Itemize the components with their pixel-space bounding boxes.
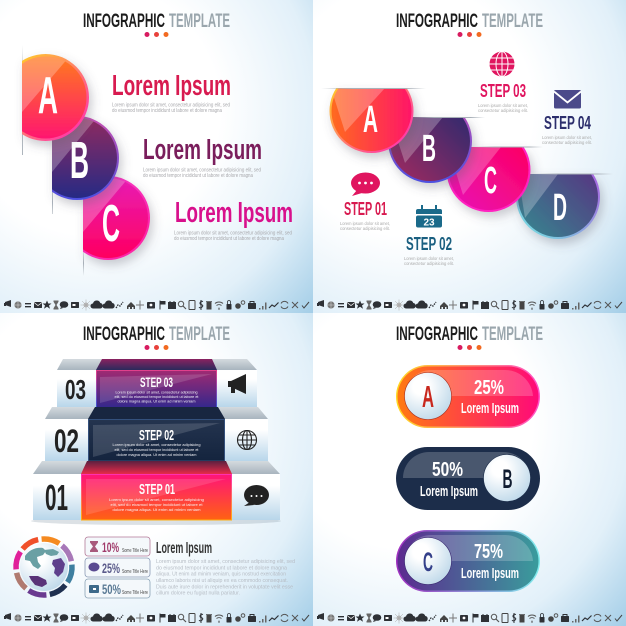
stat box 50% (85, 579, 150, 598)
stair 01: STEP 01 (139, 482, 175, 498)
stair 01 (33, 461, 280, 520)
paragraph: aliqua. Ut enim ad minim veniam, quis nostrud exercitation (156, 572, 286, 578)
icon: calendar (416, 205, 442, 228)
stair 03 (57, 359, 257, 408)
globe ring (16, 539, 72, 595)
stair 01: 01 (45, 477, 68, 518)
paragraph: Duis aute irure dolor in reprehenderit in voluptate velit esse (156, 584, 293, 590)
text A: do eiusmod tempor incididunt ut labore et dolore magna (112, 108, 222, 114)
title: INFOGRAPHIC (396, 324, 478, 345)
panel: four steps (313, 0, 626, 313)
stair shadow (31, 517, 281, 525)
stair 01: elit, sed do eiusmod tempor incididunt ut labore et (110, 502, 203, 507)
circle B (35, 110, 119, 200)
text B (143, 168, 261, 179)
icon row (4, 612, 309, 624)
step 03: Lorem ipsum dolor sit amet, (478, 103, 528, 109)
stat box 10%: 10% (102, 539, 119, 555)
heading B: Lorem Ipsum (143, 134, 262, 166)
text A (112, 102, 230, 114)
pill A: A (422, 379, 434, 414)
icon: calendar: 23 (423, 218, 435, 228)
stair 03: elit, sed do eiusmod tempor incididunt ut labore et (114, 394, 199, 399)
paragraph: Lorem ipsum dolor sit amet, consectetur adipisicing elit, sed (156, 559, 295, 565)
circle A (2, 50, 89, 141)
circle A (330, 69, 414, 153)
step 04: STEP 04 (544, 113, 591, 133)
paragraph: do eiusmod tempor incididunt ut labore et dolore magna (156, 566, 287, 572)
stair 01: Lorem ipsum dolor sit amet, consectetur adipisicing (109, 497, 204, 502)
step 02: Lorem ipsum dolor sit amet, (404, 256, 454, 262)
stair 03: Lorem ipsum dolor sit amet, consectetur adipisicing (116, 390, 198, 394)
stat box 50%: Some Title Here (122, 590, 148, 596)
circle C (446, 128, 530, 212)
step 03: consectetur adipisicing elit. (478, 108, 528, 114)
pill B: 50% (432, 459, 463, 481)
panel: ABC circles (0, 0, 313, 313)
title: INFOGRAPHIC (396, 11, 478, 32)
text C: Lorem ipsum dolor sit amet, consectetur adipisicing elit, sed (174, 230, 292, 236)
stair 03: STEP 03 (140, 375, 173, 390)
stat box 50%: 50% (102, 581, 121, 597)
title dots (458, 32, 482, 37)
stair 02 (45, 407, 268, 461)
icon row (317, 300, 622, 310)
title dots (144, 32, 168, 37)
heading A: Lorem Ipsum (112, 70, 231, 102)
panel: four steps: C (484, 160, 497, 202)
panel: ABC circles: C (102, 195, 120, 253)
pill A (396, 365, 540, 428)
stair 02: Lorem ipsum dolor sit amet, consectetur adipisicing (112, 442, 200, 447)
letter B: B (422, 128, 436, 170)
step 04 (542, 113, 592, 146)
heading: Lorem Ipsum: Lorem Ipsum (156, 540, 212, 557)
step 02: STEP 02 (406, 234, 452, 254)
pill C (396, 530, 540, 592)
pill C: Lorem Ipsum (461, 565, 519, 582)
text C (174, 230, 292, 242)
letter A: A (38, 67, 58, 125)
text A: Lorem ipsum dolor sit amet, consectetur adipisicing elit, sed (112, 102, 230, 108)
title: INFOGRAPHIC (83, 324, 165, 345)
title: INFOGRAPHIC (83, 11, 165, 32)
pill B: Lorem Ipsum (420, 483, 478, 500)
step 03: STEP 03 (480, 81, 526, 101)
step 03 (478, 81, 528, 114)
step 04: consectetur adipisicing elit. (542, 140, 592, 146)
pill A: 25% (474, 377, 504, 399)
stair 02: 02 (54, 423, 79, 459)
step 01: Lorem ipsum dolor sit amet, (340, 221, 390, 227)
panel: percentage pills (313, 313, 626, 626)
pill C: C (423, 547, 433, 577)
heading C: Lorem Ipsum (175, 197, 293, 229)
title: TEMPLATE (169, 324, 230, 345)
text B: do eiusmod tempor incididunt ut labore et dolore magna (143, 173, 253, 179)
text C: do eiusmod tempor incididunt ut labore et dolore magna (174, 236, 284, 242)
pill C: 75% (474, 541, 503, 563)
paragraph: cillum dolore eu fugiat nulla pariatur. (156, 590, 240, 596)
title dots (144, 345, 168, 350)
pill B (396, 447, 540, 510)
circle D (516, 155, 600, 239)
pill A: Lorem Ipsum (461, 400, 519, 417)
circle C (66, 170, 150, 260)
icon row (4, 300, 309, 310)
stat box 25% (85, 558, 150, 577)
step 01: consectetur adipisicing elit. (340, 226, 390, 232)
stat box 25%: Some Title Here (122, 569, 148, 575)
step 02: consectetur adipisicing elit. (404, 261, 454, 267)
stat box 10% (85, 537, 150, 556)
pill B: B (502, 464, 512, 494)
paragraph: ullamco laboris nisi ut aliquip ex ea commodo consequat. (156, 578, 288, 584)
letter A: A (363, 99, 378, 141)
step 01: STEP 01 (344, 199, 387, 219)
paragraph (156, 559, 295, 596)
title dots (458, 345, 482, 350)
stat box 25%: 25% (102, 560, 120, 576)
stair 03: 03 (65, 374, 86, 405)
stair 02: STEP 02 (139, 428, 174, 444)
step 04: Lorem ipsum dolor sit amet, (542, 135, 592, 141)
stair 03: dolore magna aliqua. Ut enim ad minim veniam (118, 398, 196, 404)
stair 02: elit, sed do eiusmod tempor incididunt ut labore et (114, 447, 199, 452)
text B: Lorem ipsum dolor sit amet, consectetur adipisicing elit, sed (143, 168, 261, 174)
title: TEMPLATE (169, 11, 230, 32)
icon: globe (490, 52, 514, 76)
stair 01: dolore magna aliqua. Ut enim ad minim veniam (112, 507, 201, 512)
step 01 (340, 199, 390, 232)
stat box 10%: Some Title Here (122, 548, 148, 554)
letter D: D (553, 187, 567, 229)
title: TEMPLATE (482, 11, 543, 32)
letter B: B (70, 132, 89, 190)
panel: staircase (0, 313, 313, 626)
stair 02: dolore magna aliqua. Ut enim ad minim veniam (116, 452, 197, 457)
circle B (388, 99, 472, 183)
step 02 (404, 234, 454, 267)
icon: mail (554, 90, 581, 108)
icon row (317, 612, 622, 624)
icon: speech bubble (351, 172, 380, 196)
title: TEMPLATE (482, 324, 543, 345)
